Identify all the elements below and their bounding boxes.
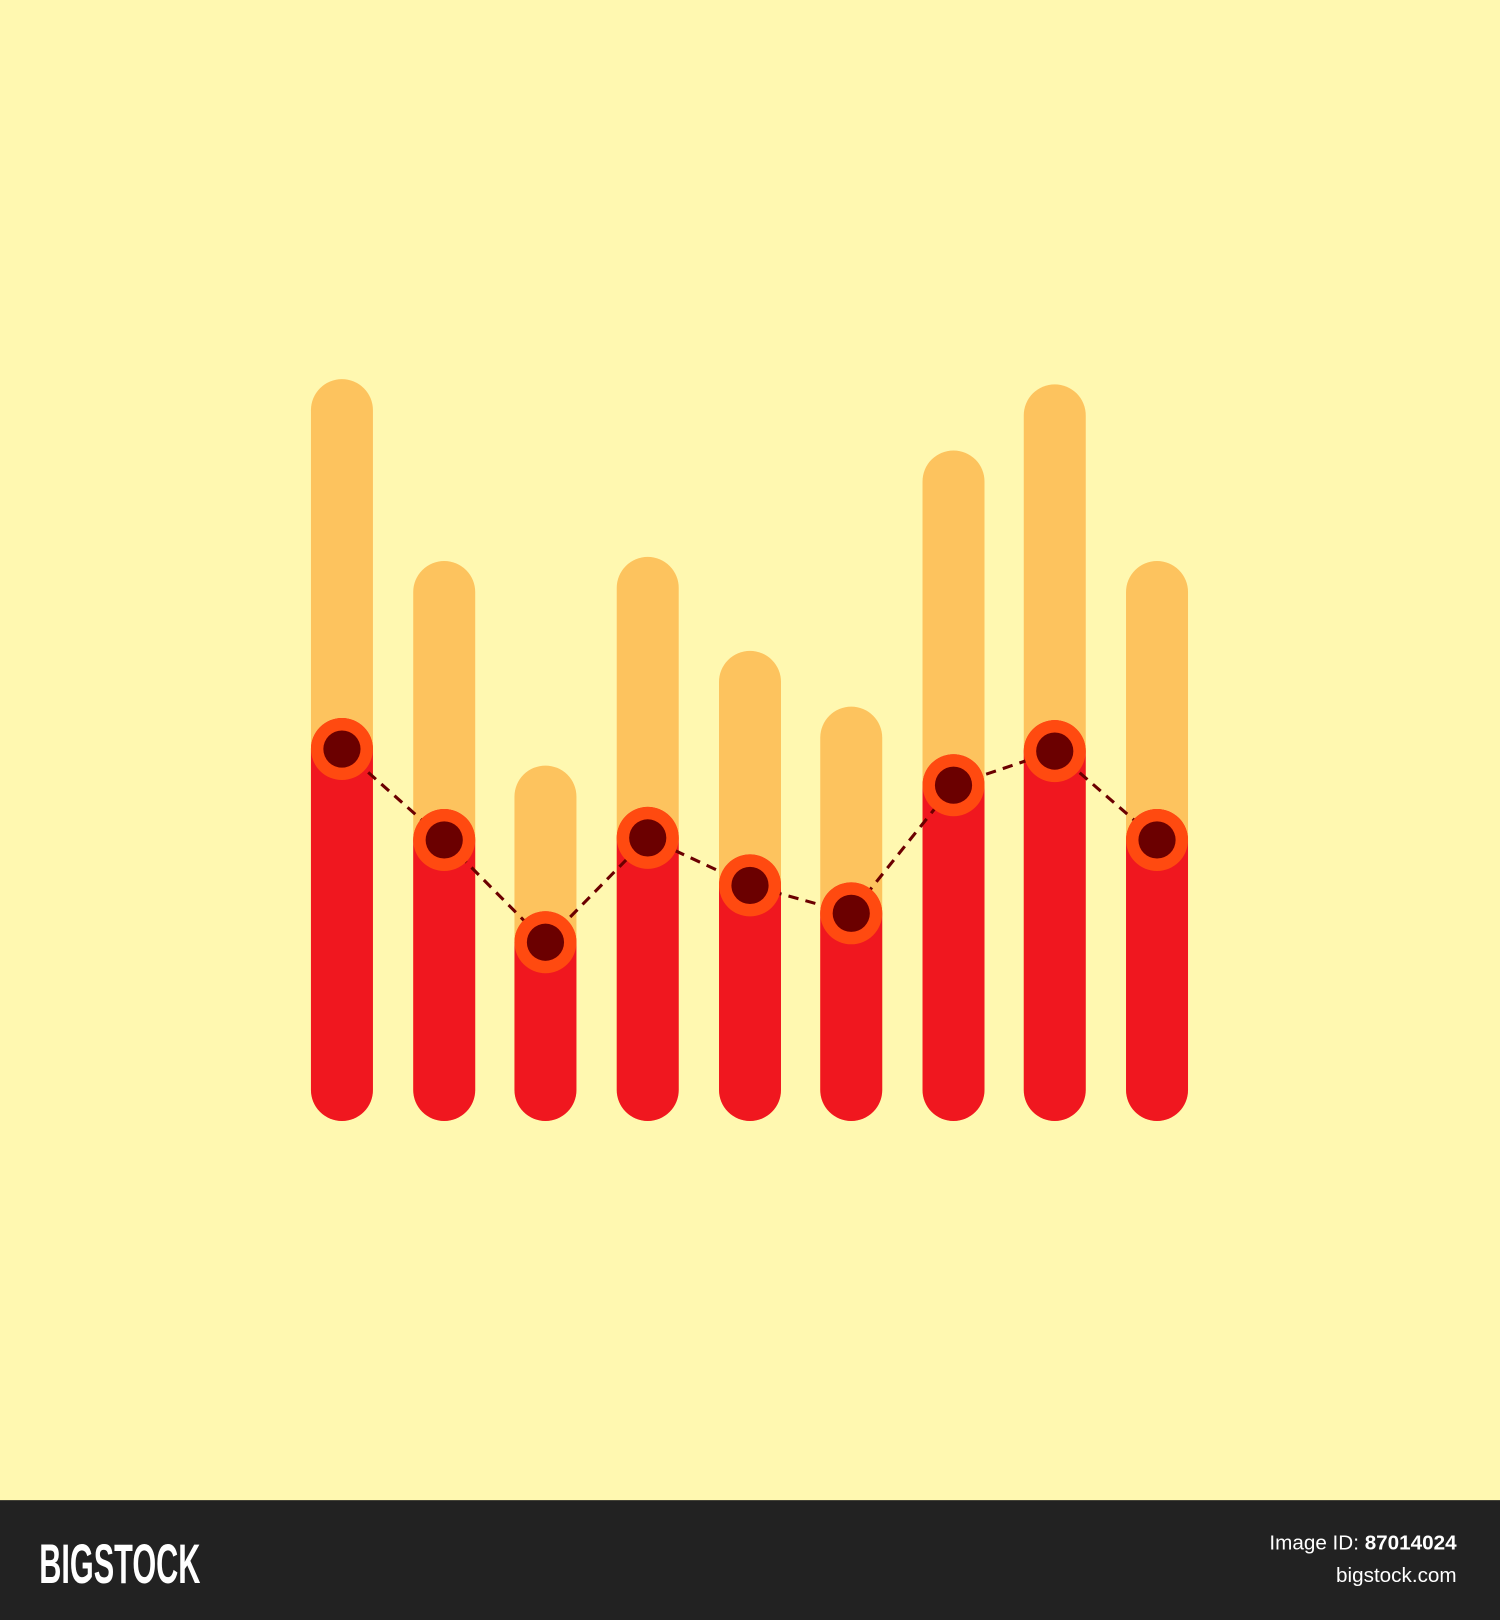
bars: background totals xyxy=(311,379,1188,1121)
dashed line xyxy=(342,749,1157,942)
footer logo: BIGSTOCK xyxy=(39,1533,200,1595)
bar chart xyxy=(311,379,1188,1121)
footer site: bigstock.com xyxy=(1336,1564,1457,1587)
data points xyxy=(311,718,1188,973)
bars: red values xyxy=(311,718,1188,1121)
footer image id: Image ID: 87014024 xyxy=(1269,1532,1457,1555)
footer bar xyxy=(0,1500,1500,1620)
